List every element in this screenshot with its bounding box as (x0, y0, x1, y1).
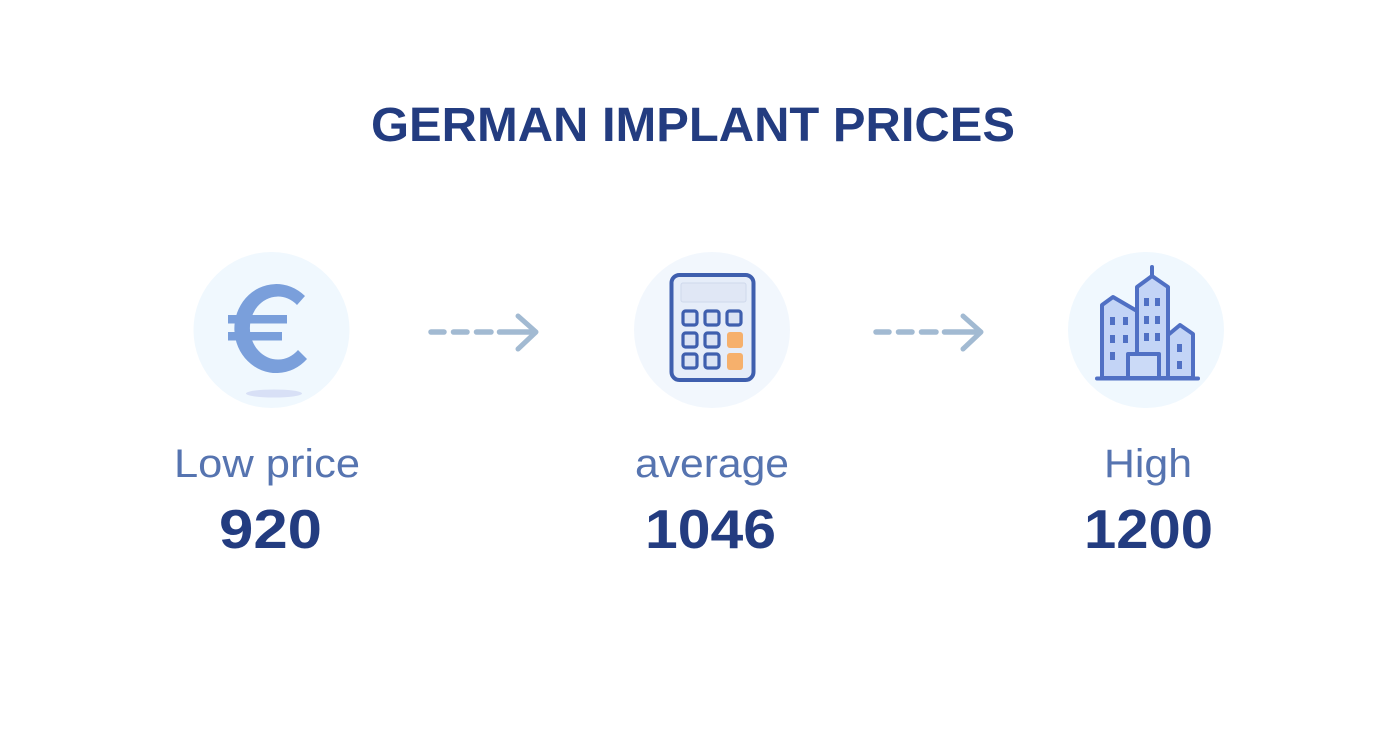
icon: calculator (634, 252, 790, 408)
label: low price: Low price (174, 442, 360, 486)
panel: high (1068, 252, 1224, 560)
icon: euro coin (194, 252, 350, 408)
arrow: low to average (431, 316, 536, 349)
panel: average (634, 252, 790, 560)
label: high: High (1104, 442, 1192, 486)
label: average: average (635, 442, 789, 486)
value: 920: 920 (219, 498, 322, 560)
arrow: average to high (876, 316, 981, 349)
panel: low price (174, 252, 360, 560)
value: 1046: 1046 (645, 498, 776, 560)
icon: buildings (1068, 252, 1224, 408)
title: GERMAN IMPLANT PRICES (371, 99, 1015, 152)
value: 1200: 1200 (1084, 498, 1213, 560)
